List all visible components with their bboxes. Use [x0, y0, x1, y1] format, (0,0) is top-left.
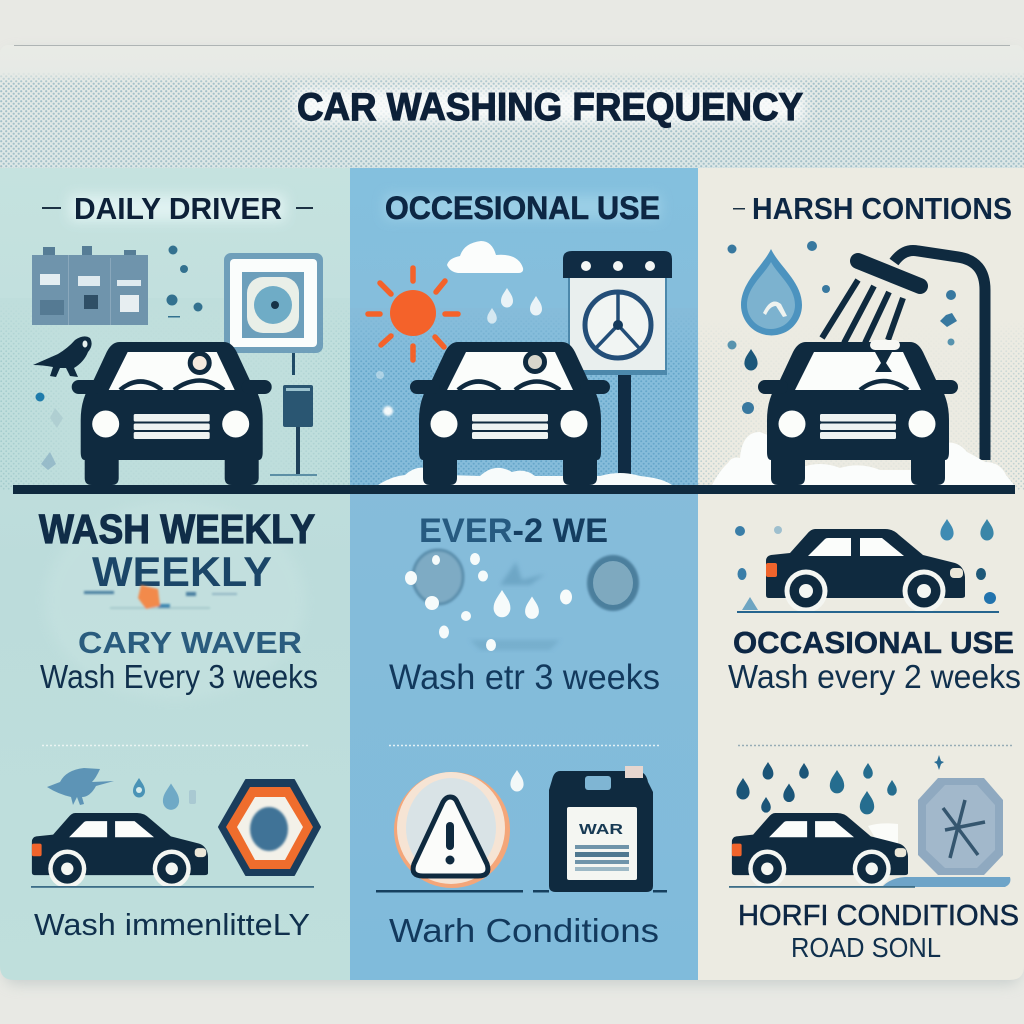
panel: occasional use — [350, 168, 698, 980]
car: occasional use — [410, 342, 610, 485]
title: CAR WASHING FREQUENCY — [297, 86, 803, 129]
text: road soil: ROAD SONL — [791, 932, 941, 963]
icon: dashboard sign — [224, 253, 323, 375]
panel: harsh conditions — [698, 168, 1024, 980]
icon: warning circle — [394, 772, 510, 888]
text: wash weekly: WASH WEEKLY — [39, 506, 315, 552]
text: occasional use: OCCASIONAL USE — [733, 625, 1014, 660]
icon: sun — [368, 268, 458, 360]
icon: calendar sign — [563, 251, 672, 476]
icon: wax container: WAR — [579, 821, 623, 838]
foam behind car — [868, 823, 898, 846]
icon: road sign plate — [918, 778, 1003, 875]
text: warh conditions: Warh Conditions — [389, 912, 659, 949]
decorative dots: daily driver — [36, 246, 202, 470]
text: every 2 weeks: EVER-2 WE — [419, 512, 608, 550]
icon: wax container — [549, 766, 653, 892]
car: daily driver — [72, 342, 272, 485]
foam — [712, 432, 1014, 485]
text: wash every 2 weeks: Wash every 2 weeks — [728, 658, 1021, 695]
icon: warning octagon — [219, 780, 320, 875]
decorative droplets: harsh conditions — [728, 241, 957, 414]
icon: gauges and droplets — [405, 550, 639, 651]
icon: cloud — [447, 241, 523, 273]
snow dots — [376, 371, 393, 416]
text: hored conditions: HORFI CONDITIONS — [738, 900, 1019, 932]
car: bottom daily driver — [32, 813, 208, 888]
heading: daily driver: DAILY DRIVER — [74, 191, 282, 226]
ground line — [31, 886, 314, 888]
header band — [0, 45, 1024, 170]
splash — [882, 877, 1010, 887]
icon: control panel — [32, 246, 148, 325]
icon: rain drops — [736, 755, 944, 814]
icon: raindrops — [487, 288, 542, 324]
smudge marks — [84, 585, 237, 609]
text: cary waver: CARY WAVER — [78, 625, 302, 660]
icon: drops — [133, 778, 196, 810]
snow mound — [378, 468, 672, 485]
icon: small drop — [510, 770, 524, 791]
divider dots — [389, 744, 660, 746]
icon: blue bird — [47, 768, 114, 805]
icon: water drop — [741, 249, 802, 335]
icon: parking meter — [270, 385, 317, 476]
car: harsh side view — [732, 813, 908, 888]
car: occasional side view — [766, 529, 965, 612]
panel: daily driver — [0, 168, 350, 980]
car: harsh conditions — [758, 340, 958, 485]
text: wash immediately: Wash immenlitteLY — [34, 907, 310, 942]
ground line — [376, 890, 667, 892]
icon: shower — [822, 250, 985, 460]
divider dots — [42, 744, 310, 746]
heading: occesional use: OCCESIONAL USE — [385, 190, 660, 226]
decorative droplets: mid — [735, 519, 996, 610]
divider dots — [738, 744, 1013, 746]
icon: bird — [33, 336, 92, 377]
ground line — [737, 611, 999, 613]
text: weekly: WEEKLY — [92, 548, 272, 595]
text: wash every 3 weeks: Wash etr 3 weeks — [389, 658, 660, 697]
ground line — [729, 886, 915, 888]
road line — [13, 485, 1015, 494]
text: wash every 3 weeks: Wash Every 3 weeks — [40, 658, 318, 695]
